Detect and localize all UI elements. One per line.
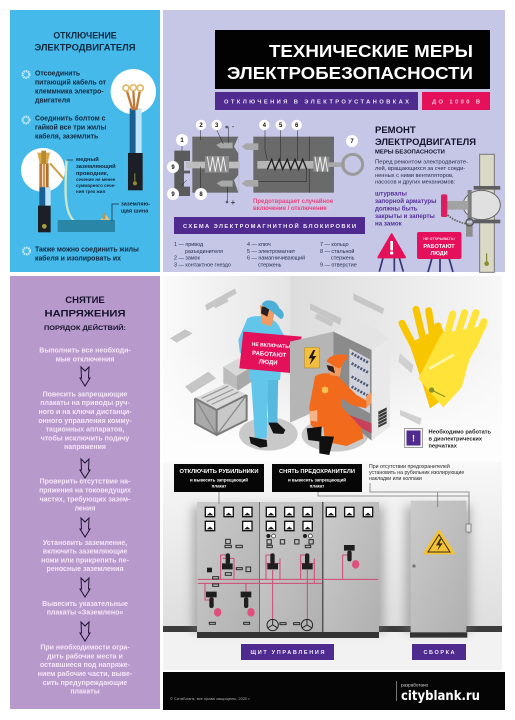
icon: do not open placard xyxy=(417,232,462,272)
text block: valves locked xyxy=(375,191,436,228)
heading: motor repair: ЭЛЕКТРОДВИГАТЕЛЯ xyxy=(375,137,476,148)
footer xyxy=(163,672,505,710)
list of steps: кабеля и изолировать их xyxy=(35,254,121,262)
text block: repair intro: ненных с ними вентиляторов, xyxy=(375,173,454,179)
mimic diagram xyxy=(198,534,378,631)
illustration: floor shadows xyxy=(239,417,368,452)
step 3: частях, требующих зазем- xyxy=(40,496,131,504)
placard text: ЛЮДИ xyxy=(258,359,278,367)
step 1: Выполнить все необходи- xyxy=(39,347,131,355)
text block: valves locked: должны быть xyxy=(375,206,418,213)
callout: remove fuses: СНЯТЬ ПРЕДОХРАНИТЕЛИ xyxy=(279,469,355,475)
step 4: включить заземляющие xyxy=(43,549,127,556)
callout: disconnect switches xyxy=(174,464,264,492)
heading: motor repair xyxy=(375,125,476,156)
heading: motor disconnection: ЭЛЕКТРОДВИГАТЕЛЯ xyxy=(34,42,136,52)
step 2: напряжения xyxy=(64,444,106,451)
step 5 xyxy=(42,601,128,617)
icon: do not open placard: ЛЮДИ xyxy=(430,251,448,257)
list of steps: Соединить болтом с xyxy=(35,114,106,122)
arrow xyxy=(80,367,90,386)
callout: insulating covers: При отсутствии предохранителей xyxy=(369,463,450,470)
callout: insulating covers xyxy=(369,463,464,482)
voltage tag xyxy=(422,92,490,110)
title block: ТЕХНИЧЕСКИЕ МЕРЫ xyxy=(269,41,473,61)
note: prevents accidental switching: Предотвращает случайное xyxy=(253,198,334,205)
step 2 xyxy=(38,391,132,451)
banner: lock diagram: СХЕМА ЭЛЕКТРОМАГНИТНОЙ БЛОКИРОВКИ xyxy=(183,222,356,230)
list of steps xyxy=(35,70,139,262)
step 4: Установить заземление, xyxy=(43,540,127,547)
placard text: НЕ ВКЛЮЧАТЬ! xyxy=(252,342,291,350)
callout: remove fuses: плакат xyxy=(310,484,325,488)
icon: step markers xyxy=(23,71,30,254)
legend: 6 — намагничивающий xyxy=(247,254,305,262)
illustration: dielectric gloves xyxy=(398,309,487,425)
label: control board: ЩИТ УПРАВЛЕНИЯ xyxy=(250,650,325,656)
subtitle bar xyxy=(215,92,418,110)
note: dielectric gloves required: Необходимо работать xyxy=(428,428,492,436)
step 6: дить рабочие места и xyxy=(47,652,123,660)
legend: разъединителя xyxy=(185,249,223,255)
number badges xyxy=(167,120,358,207)
illustration: worker with placard xyxy=(238,300,302,448)
legend xyxy=(174,242,357,268)
callout: insulating covers: установить на рубильник изолирующие xyxy=(369,470,464,476)
number badges: - xyxy=(232,124,235,131)
number badges: 2 xyxy=(199,123,203,129)
background walls xyxy=(163,276,502,670)
list of steps: питающий кабель от xyxy=(35,78,107,86)
list of steps: Также можно соединить жилы xyxy=(35,246,139,254)
step 2: ного и на ключи дистанци- xyxy=(38,409,132,416)
number badges: 9 xyxy=(171,165,175,171)
step 4 xyxy=(41,540,130,573)
callout: copper conductor: проводник, xyxy=(76,171,109,177)
step 2: плакаты на приводы руч- xyxy=(40,400,130,407)
legend: стержень xyxy=(331,256,355,262)
illustration: bonded cable and grounding bus xyxy=(21,148,115,232)
legend: 4 — ключ xyxy=(247,242,271,248)
panel: motor disconnection xyxy=(10,10,160,272)
callout: copper conductor: заземляющий xyxy=(76,163,116,170)
callout: copper conductor xyxy=(66,156,116,194)
callout: copper conductor: сечение не менее xyxy=(76,177,116,182)
title block xyxy=(215,30,490,89)
heading: motor repair: МЕРЫ БЕЗОПАСНОСТИ xyxy=(375,150,445,156)
step 6: нием рабочие части, выве- xyxy=(38,670,133,678)
heading: removing voltage: НАПРЯЖЕНИЯ xyxy=(44,308,126,320)
icon: do not open placard: РАБОТАЮТ xyxy=(423,244,455,250)
number badges: 1 xyxy=(180,138,184,144)
legend: 1 — привод xyxy=(174,242,204,248)
panel: removing voltage xyxy=(10,276,160,709)
list of steps: двигателя xyxy=(35,98,70,104)
text block: repair intro: насосов и других механизмов: xyxy=(375,180,456,186)
heading: removing voltage xyxy=(44,295,126,332)
footer: © СитиБланк, все права защищены, 2020 г. xyxy=(170,696,250,701)
callout: insulating covers: накладки или колпаки xyxy=(369,476,422,482)
callout: disconnect switches: и вывесить запрещающий xyxy=(190,477,248,482)
list of steps: Отсоединить xyxy=(35,70,80,78)
leader lines xyxy=(219,483,471,534)
wall bricks xyxy=(170,288,384,393)
text block: valves locked: на замок xyxy=(375,221,403,228)
illustration: cable with three lugs xyxy=(111,69,156,190)
list of steps: клеммника электро- xyxy=(35,88,104,96)
note: prevents accidental switching: включение / отключение xyxy=(253,206,327,212)
banner: lock diagram xyxy=(174,217,365,234)
note: dielectric gloves required: ! xyxy=(412,434,415,444)
list of steps: гайкой все три жилы xyxy=(35,124,107,132)
title block: ЭЛЕКТРОБЕЗОПАСНОСТИ xyxy=(227,63,473,83)
control board xyxy=(197,502,379,638)
heading: motor repair: РЕМОНТ xyxy=(375,125,416,136)
step 3 xyxy=(39,479,131,512)
note: dielectric gloves required: перчатках xyxy=(428,444,458,450)
illustration: locked valve on pipe xyxy=(441,154,500,272)
label: assembly: СБОРКА xyxy=(424,650,455,656)
assembly cabinet xyxy=(410,501,467,638)
step 5: плакаты «Заземлено» xyxy=(47,610,123,617)
note: dielectric gloves required: в диэлектрических xyxy=(428,436,483,442)
legend: 3 — контактное гнездо xyxy=(174,262,231,268)
legend: 7 — кольцо xyxy=(320,242,349,248)
text block: repair intro: лей, вращающихся за счет соеди- xyxy=(375,165,465,172)
step 4: реносные заземления xyxy=(46,566,124,573)
number badges: + xyxy=(231,198,236,207)
number badges: 4 xyxy=(263,123,267,129)
heading: motor disconnection: ОТКЛЮЧЕНИЕ xyxy=(53,30,117,40)
icon: do not open placard: НЕ ОТКРЫВАТЬ! xyxy=(423,237,455,241)
illustration: crates xyxy=(195,358,252,435)
legend: 2 — замок xyxy=(174,256,201,262)
arrow xyxy=(80,578,90,597)
list of steps: кабеля, заземлить xyxy=(35,132,98,140)
step 2: онного управления комму- xyxy=(38,418,132,425)
callout: grounding bus xyxy=(112,202,150,221)
number badges: 8 xyxy=(199,192,203,198)
text block: repair intro xyxy=(375,160,468,186)
step 3: Проверить отсутствие на- xyxy=(40,479,131,486)
panel shadows xyxy=(192,506,471,632)
note: dielectric gloves required xyxy=(404,428,492,450)
number badges: 5 xyxy=(279,123,283,129)
label: assembly xyxy=(412,644,466,660)
step 1: мые отключения xyxy=(56,356,114,363)
subtitle bar: ОТКЛЮЧЕНИЯ В ЭЛЕКТРОУСТАНОВКАХ xyxy=(224,99,409,105)
footer: разработано xyxy=(401,682,429,688)
step 4: ножи или прикрепить пе- xyxy=(41,557,130,564)
icon: high voltage triangle xyxy=(424,531,454,553)
label: control board xyxy=(241,644,334,660)
legend: 5 — электромагнит xyxy=(247,249,296,255)
callout: copper conductor: суммарного сече- xyxy=(76,183,116,188)
step 5: Вывесить указательные xyxy=(42,601,128,608)
step 2: тационных аппаратов, xyxy=(46,427,124,434)
panel: technical measures xyxy=(163,10,505,272)
callout: remove fuses: и вывесить запрещающий xyxy=(288,477,346,482)
footer: cityblank.ru xyxy=(401,688,480,704)
step 6 xyxy=(38,644,133,696)
illustration: kneeling worker xyxy=(307,354,372,455)
callout: copper conductor: ния трех жил xyxy=(76,189,105,194)
text block: repair intro: Перед ремонтом электродвигате- xyxy=(375,160,468,166)
callout: disconnect switches: плакат xyxy=(212,484,227,488)
indicator windows xyxy=(205,507,373,531)
step 6: оставшиеся под напряже- xyxy=(40,662,131,669)
step 3: пряжения на токоведущих xyxy=(39,487,131,494)
step 1 xyxy=(39,347,131,363)
step 3: ления xyxy=(75,505,95,512)
callout: disconnect switches: ОТКЛЮЧИТЬ РУБИЛЬНИКИ xyxy=(180,469,258,475)
text block: valves locked: запорной арматуры xyxy=(375,198,436,205)
number badges: 7 xyxy=(350,139,354,145)
heading: removing voltage: СНЯТИЕ xyxy=(65,295,105,306)
callout: remove fuses xyxy=(272,464,362,492)
step 2: чтобы исключить подачу xyxy=(41,434,129,442)
legend: 9 — отверстие xyxy=(320,262,357,268)
step 6: При необходимости огра- xyxy=(40,644,130,652)
number badges: 3 xyxy=(215,123,219,129)
text block: valves locked: штурвалы xyxy=(375,191,407,198)
placard text xyxy=(252,342,291,367)
step 6: плакаты xyxy=(70,689,100,696)
placard text: РАБОТАЮТ xyxy=(252,351,287,359)
legend: стержень xyxy=(258,262,282,268)
arrow xyxy=(80,459,90,478)
voltage tag: ДО 1000 В xyxy=(432,99,480,105)
icon: warning sign xyxy=(378,234,405,272)
heading: motor disconnection xyxy=(34,30,136,52)
callout: grounding bus: щая шина xyxy=(121,208,149,214)
callout: copper conductor: медный xyxy=(76,156,99,163)
panel: workshop scene xyxy=(163,276,502,670)
arrow xyxy=(80,622,90,641)
illustration: electrical cabinet xyxy=(290,320,390,441)
text block: valves locked: закрыты и заперты xyxy=(375,213,435,220)
number badges: 9 xyxy=(171,192,175,198)
step 6: сить предупреждающие xyxy=(43,680,127,687)
diagram: electromagnetic lock xyxy=(167,120,363,207)
step 2: Повесить запрещающие xyxy=(43,391,128,398)
note: prevents accidental switching xyxy=(252,197,334,212)
legend: 8 — стальной xyxy=(320,248,354,255)
callout: grounding bus: заземляю- xyxy=(121,202,150,208)
number badges: 6 xyxy=(295,123,299,129)
arrow xyxy=(80,518,90,537)
heading: removing voltage: ПОРЯДОК ДЕЙСТВИЙ: xyxy=(44,323,126,332)
